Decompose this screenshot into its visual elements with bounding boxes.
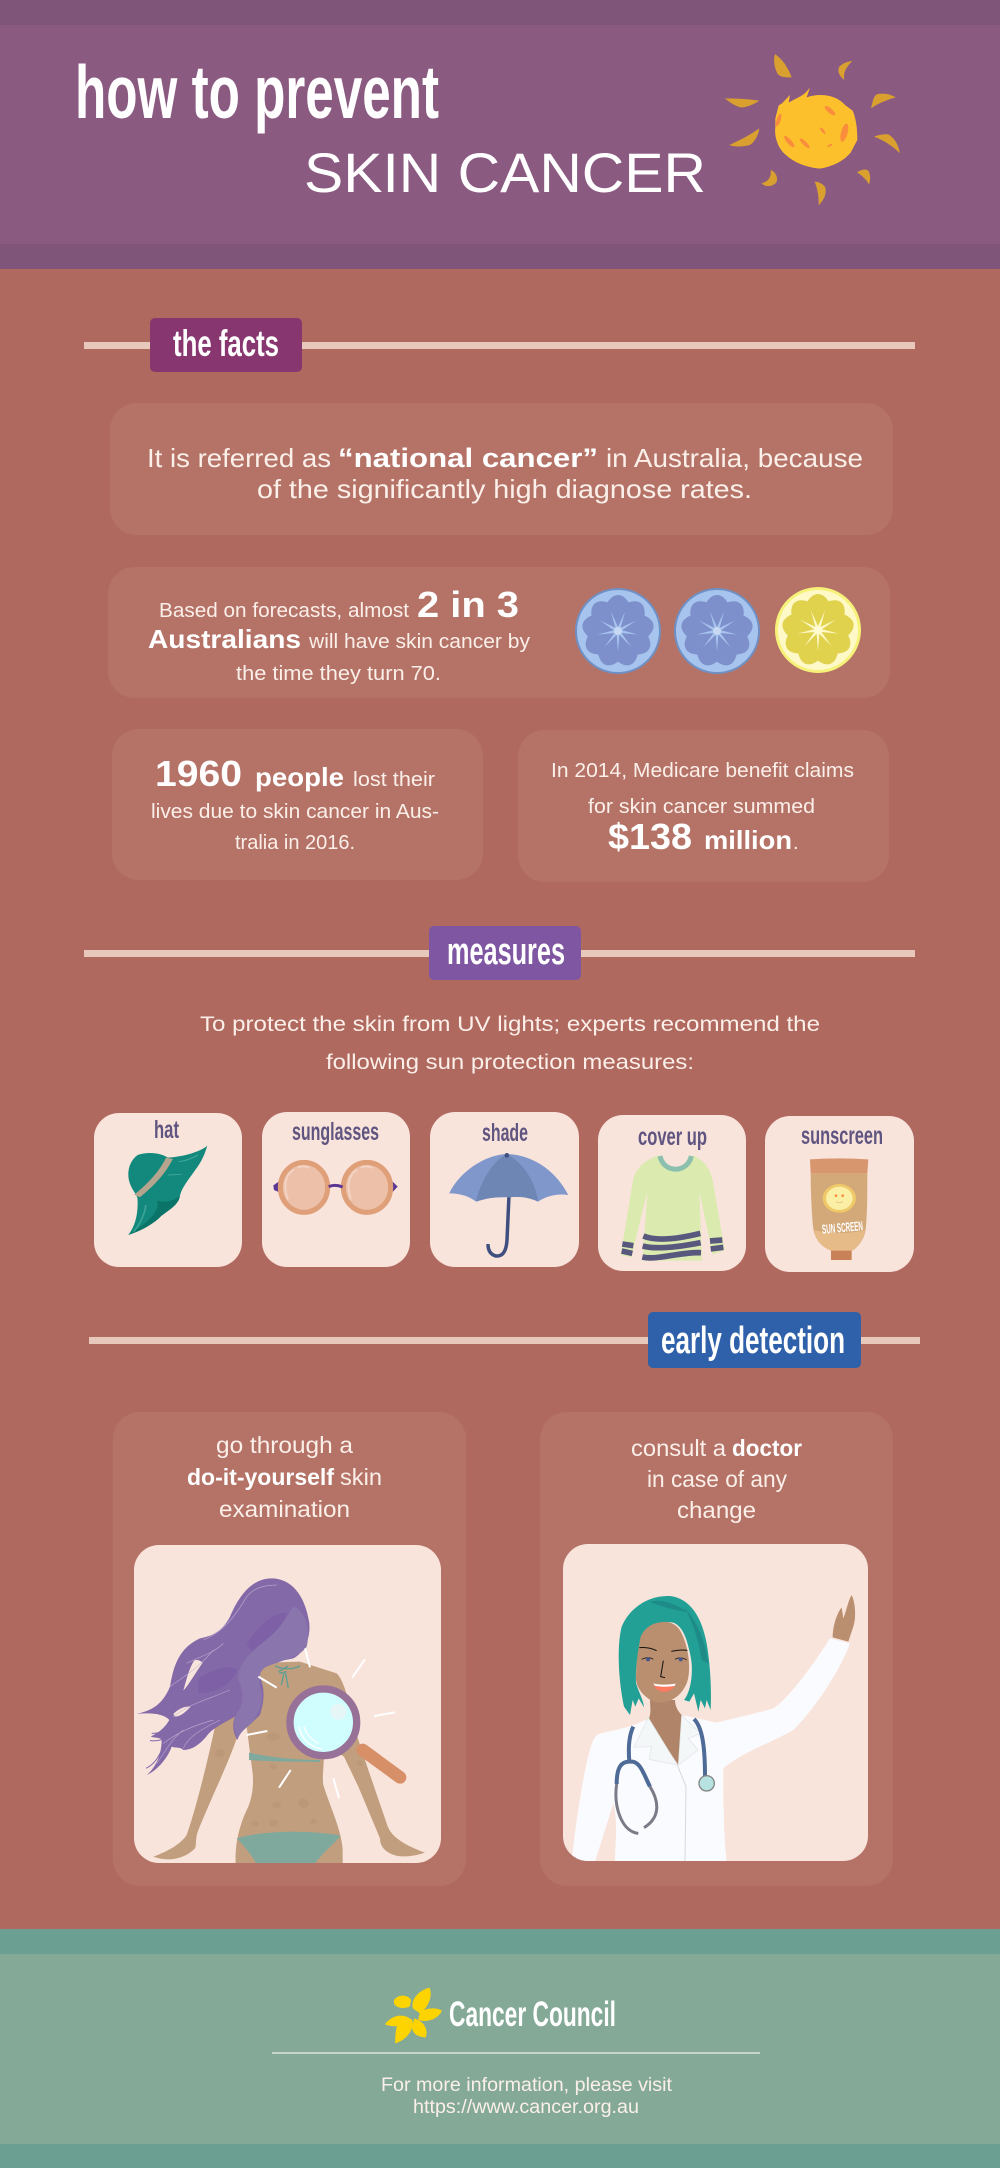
panel: self examination	[113, 1412, 466, 1886]
panel: Medicare claims fact: In 2014, Medicare benefit claims	[551, 760, 854, 782]
panel: 2 in 3 Australians fact	[108, 567, 890, 698]
magnifier	[363, 1750, 400, 1777]
panel: national cancer fact: of the significantly high diagnose rates.	[257, 474, 752, 504]
label: sunscreen: sunscreen	[801, 1122, 883, 1150]
panel: 1960 people fact: people	[255, 762, 344, 792]
label: sunglasses: sunglasses	[292, 1118, 379, 1146]
icon: sunglasses	[273, 1162, 398, 1212]
panel: Medicare claims fact: .	[793, 832, 799, 854]
footer text	[381, 2075, 673, 2118]
panel: consult a doctor	[540, 1412, 893, 1886]
section bar: the facts	[84, 318, 915, 372]
sparkle lines	[247, 1648, 395, 1798]
card: sunglasses	[262, 1112, 410, 1267]
panel: self examination: examination	[219, 1496, 350, 1522]
panel: self examination: go through a	[216, 1432, 353, 1458]
panel: national cancer fact	[110, 403, 893, 535]
panel: Medicare claims fact: $138	[608, 816, 692, 857]
icon: blue citrus slice	[674, 588, 760, 674]
logo text: Cancer Council	[449, 1995, 616, 2034]
panel: Medicare claims fact: million	[704, 825, 792, 855]
icon: sun	[725, 54, 900, 205]
footer text: For more information, please visit	[381, 2075, 673, 2096]
label: hat: hat	[154, 1116, 179, 1144]
illustration: doctor with raised arm	[563, 1544, 868, 1862]
panel: Medicare claims fact: for skin cancer summed	[588, 796, 815, 818]
panel: 2 in 3 Australians fact: Australians	[148, 624, 301, 654]
panel: 1960 people fact: tralia in 2016.	[235, 832, 355, 854]
panel: self examination: skin	[340, 1464, 382, 1490]
panel: 2 in 3 Australians fact: the time they turn 70.	[236, 663, 441, 685]
panel: national cancer fact: It is referred as	[147, 443, 331, 473]
text: measures intro: following sun protection measures:	[326, 1051, 694, 1074]
icon: hat	[128, 1146, 207, 1235]
icon: daffodil logo	[385, 1988, 442, 2043]
icon: sunscreen tube	[810, 1158, 868, 1260]
panel: consult a doctor: consult a	[631, 1435, 726, 1461]
panel: 1960 people fact: 1960	[155, 753, 242, 794]
text: measures intro	[200, 1013, 820, 1074]
card: cover up	[598, 1115, 746, 1271]
panel: consult a doctor: doctor	[732, 1435, 802, 1461]
panel: 2 in 3 Australians fact: 2 in 3	[417, 584, 519, 625]
footer	[0, 1929, 1000, 2168]
header banner	[0, 0, 1000, 269]
label: shade: shade	[482, 1119, 528, 1147]
label: cover up: cover up	[638, 1123, 707, 1151]
panel: self examination: do-it-yourself	[187, 1464, 334, 1490]
illustration: woman checking her back with a magnifier	[134, 1545, 441, 1865]
panel: consult a doctor: change	[677, 1497, 756, 1523]
section bar: measures	[84, 926, 915, 980]
card: hat	[94, 1113, 242, 1267]
section bar: early detection	[89, 1312, 920, 1368]
title: how to prevent: how to prevent	[75, 50, 439, 134]
text: measures intro: To protect the skin from UV lights; experts recommend the	[200, 1013, 820, 1036]
heading: the facts: the facts	[173, 323, 279, 364]
icon: sweater	[621, 1156, 725, 1261]
title: skin cancer: SKIN CANCER	[304, 141, 706, 204]
panel: 2 in 3 Australians fact: Based on forecasts, almost	[159, 600, 409, 622]
panel: 1960 people fact: lost their	[353, 769, 435, 791]
footer text: https://www.cancer.org.au	[413, 2097, 639, 2118]
head	[636, 1621, 689, 1703]
icon: yellow citrus slice	[775, 587, 861, 673]
icon: sunscreen tube: SUN SCREEN	[821, 1218, 864, 1237]
panel: 1960 people fact	[112, 729, 483, 880]
card: sunscreen	[765, 1116, 914, 1272]
heading: early detection: early detection	[661, 1320, 845, 1362]
panel: 1960 people fact: lives due to skin cancer in Aus-	[151, 801, 439, 823]
icon: umbrella	[449, 1153, 568, 1256]
panel: national cancer fact: in Australia, because	[606, 443, 863, 473]
icon: blue citrus slice	[575, 588, 661, 674]
hair	[137, 1578, 309, 1775]
panel: 2 in 3 Australians fact: will have skin cancer by	[308, 631, 530, 653]
card: shade	[430, 1112, 579, 1267]
heading: measures: measures	[447, 931, 565, 973]
panel: national cancer fact: “national cancer”	[338, 443, 598, 473]
panel: consult a doctor: in case of any	[647, 1466, 787, 1492]
panel: Medicare claims fact	[518, 730, 889, 882]
